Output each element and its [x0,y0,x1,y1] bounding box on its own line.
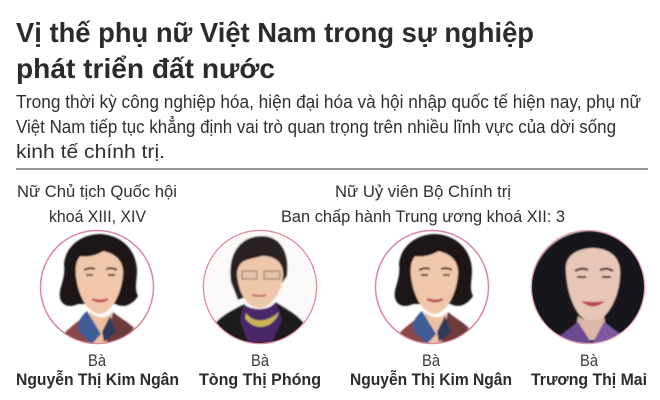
caption: Nguyễn Thị Kim Ngân: Nguyễn Thị Kim Ngân [16,370,179,389]
heading: female Politburo members: Nữ Uỷ viên Bộ Chính trị [335,182,511,201]
heading: chairwoman of the National Assembly [17,182,177,226]
intro text [16,92,641,163]
caption: Nguyễn Thị Kim Ngân [16,351,179,389]
portrait: Tòng Thị Phóng [200,230,320,345]
title [16,17,534,84]
heading: female Politburo members [281,182,565,226]
caption: Nguyễn Thị Kim Ngân (Politburo): Bà [422,351,440,370]
portrait: Nguyễn Thị Kim Ngân [40,230,154,344]
title: phát triển đất nước [16,53,275,84]
portrait: Nguyễn Thị Kim Ngân (Politburo) [376,230,488,344]
title: Vị thế phụ nữ Việt Nam trong sự nghiệp [16,17,534,48]
intro text: Việt Nam tiếp tục khẳng định vai trò quan trọng trên nhiều lĩnh vực của dời sống [16,116,616,137]
heading: female Politburo members: Ban chấp hành Trung ương khoá XII: 3 [281,207,565,226]
intro text: Trong thời kỳ công nghiệp hóa, hiện đại hóa và hội nhập quốc tế hiện nay, phụ nữ [16,92,641,112]
caption: Trương Thị Mai [531,351,647,389]
caption: Trương Thị Mai: Bà [580,351,598,370]
caption: Tòng Thị Phóng [199,351,321,389]
caption: Nguyễn Thị Kim Ngân (Politburo) [350,351,512,389]
portrait: Trương Thị Mai [530,230,646,344]
heading: chairwoman of the National Assembly: Nữ Chủ tịch Quốc hội [17,182,177,201]
caption: Nguyễn Thị Kim Ngân: Bà [88,351,106,370]
caption: Trương Thị Mai: Trương Thị Mai [531,370,647,389]
intro text: kinh tế chính trị. [16,142,165,163]
caption: Nguyễn Thị Kim Ngân (Politburo): Nguyễn Thị Kim Ngân [350,370,512,389]
heading: chairwoman of the National Assembly: khoá XIII, XIV [49,207,147,226]
caption: Tòng Thị Phóng: Tòng Thị Phóng [199,370,321,389]
caption: Tòng Thị Phóng: Bà [251,351,269,370]
